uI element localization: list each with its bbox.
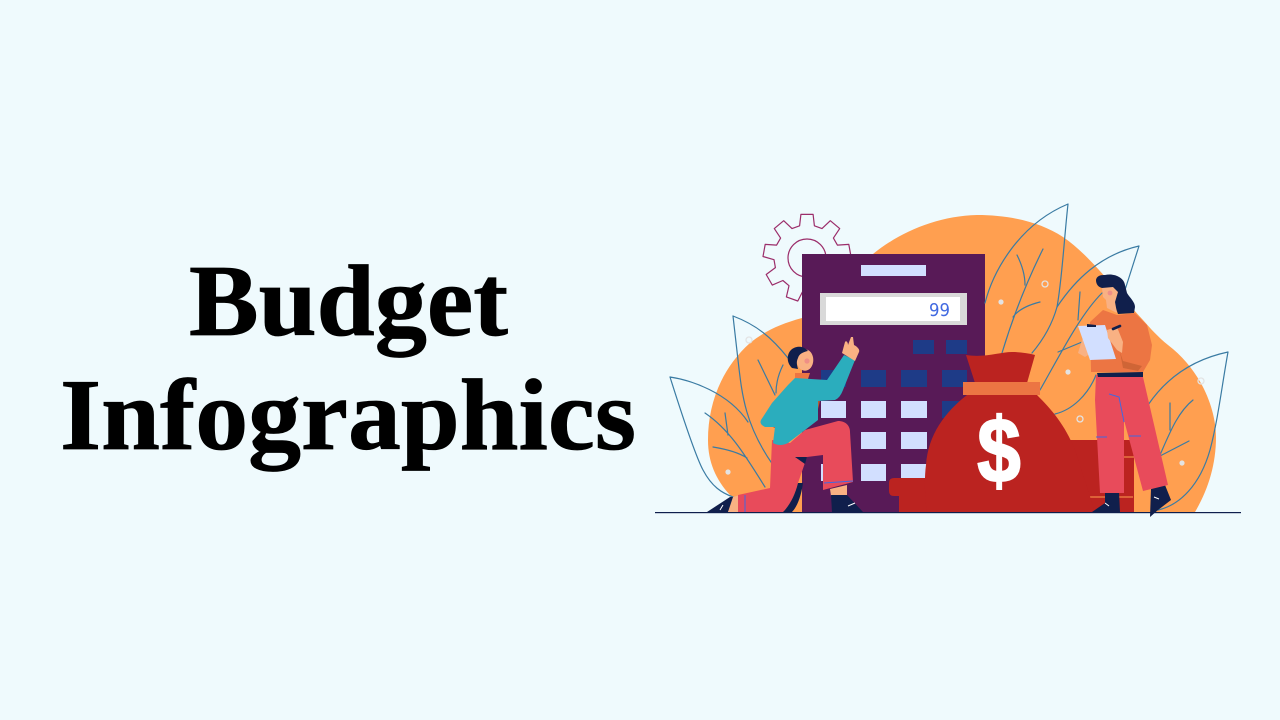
left leaves [670, 316, 788, 497]
calculator display: 99 [929, 301, 950, 321]
orange background blob [708, 215, 1216, 512]
bag body [925, 395, 1095, 512]
man hand [842, 337, 859, 361]
calculator body [802, 254, 985, 512]
woman left hand [1078, 337, 1092, 357]
calculator dark keys [821, 340, 967, 418]
right leaves [985, 204, 1228, 510]
title: Infographics [60, 359, 636, 472]
woman hair back [1096, 275, 1135, 314]
dollar sign: $ [977, 400, 1021, 502]
calculator display [820, 293, 967, 325]
title [60, 245, 636, 472]
bag band [963, 382, 1040, 395]
man front foot [830, 485, 847, 496]
decorative dots [725, 281, 1204, 475]
clipboard [1078, 325, 1116, 360]
woman right hand with pen [1107, 327, 1123, 353]
bag base [889, 440, 1134, 512]
man back foot [707, 497, 735, 512]
ground line [655, 512, 1241, 513]
woman face [1102, 287, 1118, 313]
woman shoes [1092, 492, 1120, 512]
gear outline [763, 214, 851, 301]
man character [707, 337, 863, 512]
man sweater [760, 355, 855, 445]
man trousers [738, 421, 853, 512]
woman shirt [1090, 310, 1152, 372]
man head [797, 349, 813, 371]
woman character [1078, 275, 1171, 517]
money bag [889, 352, 1134, 512]
title: Budget [189, 245, 508, 358]
calculator light keys [821, 401, 927, 481]
calculator top bar [861, 265, 926, 276]
bag neck [966, 352, 1035, 383]
woman trousers [1095, 375, 1168, 493]
calculator [802, 254, 985, 512]
man collar [795, 373, 810, 380]
illustration [655, 204, 1241, 517]
woman belt [1097, 372, 1143, 377]
